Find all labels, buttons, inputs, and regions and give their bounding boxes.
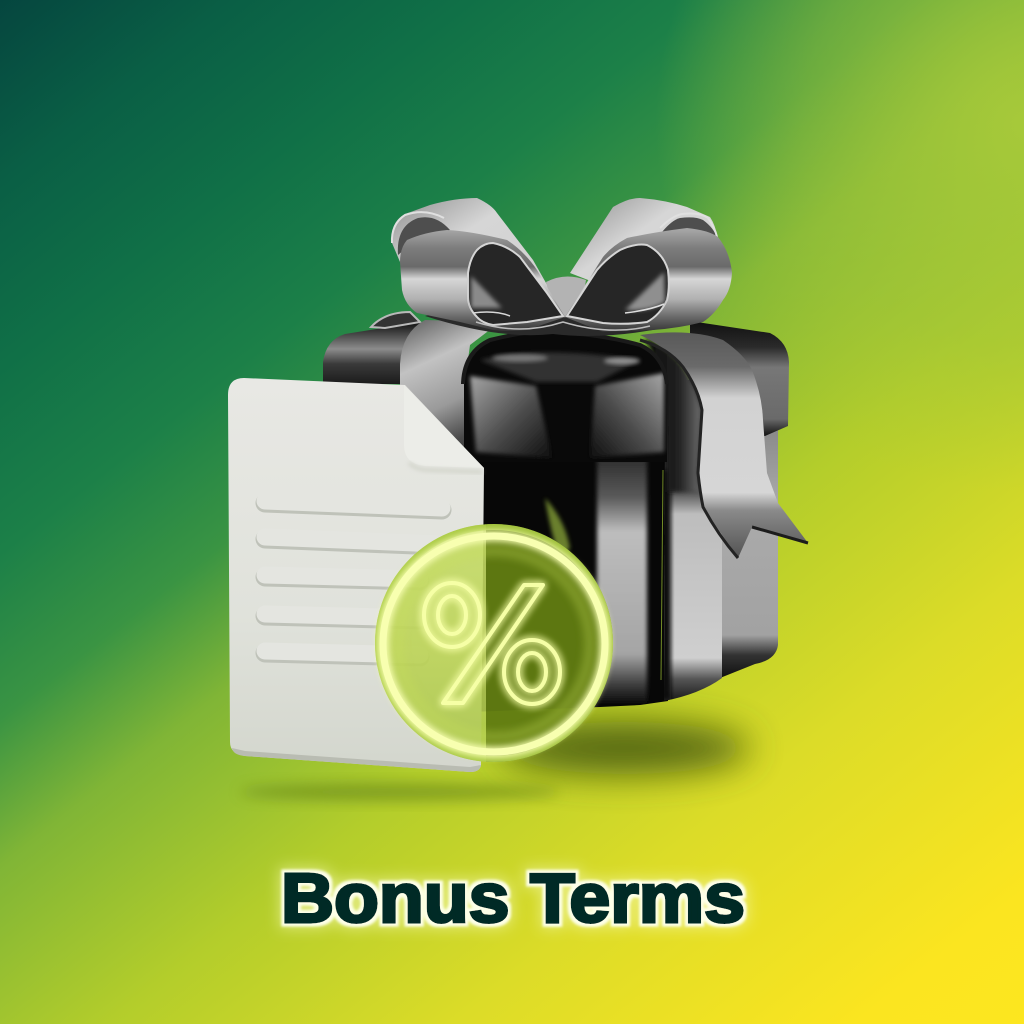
document text lines bbox=[265, 501, 442, 657]
bow front left loop bbox=[400, 230, 565, 331]
bow front right loop bbox=[565, 228, 732, 332]
neon ring bbox=[383, 536, 605, 752]
lid right section bbox=[690, 321, 789, 436]
bottom edge shade bbox=[232, 748, 481, 772]
dark ribbon fold bbox=[645, 338, 702, 492]
bow lower rim bbox=[476, 322, 650, 330]
ribbon tail with notch bbox=[640, 332, 808, 558]
bow right loop opening bbox=[567, 245, 669, 324]
bow back loops bbox=[392, 198, 550, 300]
document bbox=[228, 378, 484, 772]
percent coin bbox=[370, 520, 618, 770]
bow knot bbox=[546, 276, 586, 318]
folded corner bbox=[404, 385, 484, 468]
vertical ribbon bbox=[664, 380, 722, 701]
base under bow bbox=[425, 306, 705, 336]
gift box bbox=[323, 198, 808, 713]
ribbon over lid left bbox=[400, 320, 500, 470]
box right side bbox=[715, 425, 778, 680]
glass disc bbox=[370, 520, 618, 770]
document sheet bbox=[228, 378, 484, 772]
box body front bbox=[466, 458, 670, 713]
lid front bbox=[464, 334, 667, 462]
small back ribbon edge bbox=[371, 312, 420, 328]
lid left section bbox=[323, 322, 430, 384]
lid rim line bbox=[463, 332, 667, 384]
title: Bonus Terms: Bonus Terms bbox=[281, 859, 745, 937]
ground shadows bbox=[240, 722, 750, 801]
neon percent sign bbox=[424, 583, 560, 704]
bow left loop opening bbox=[468, 243, 563, 325]
